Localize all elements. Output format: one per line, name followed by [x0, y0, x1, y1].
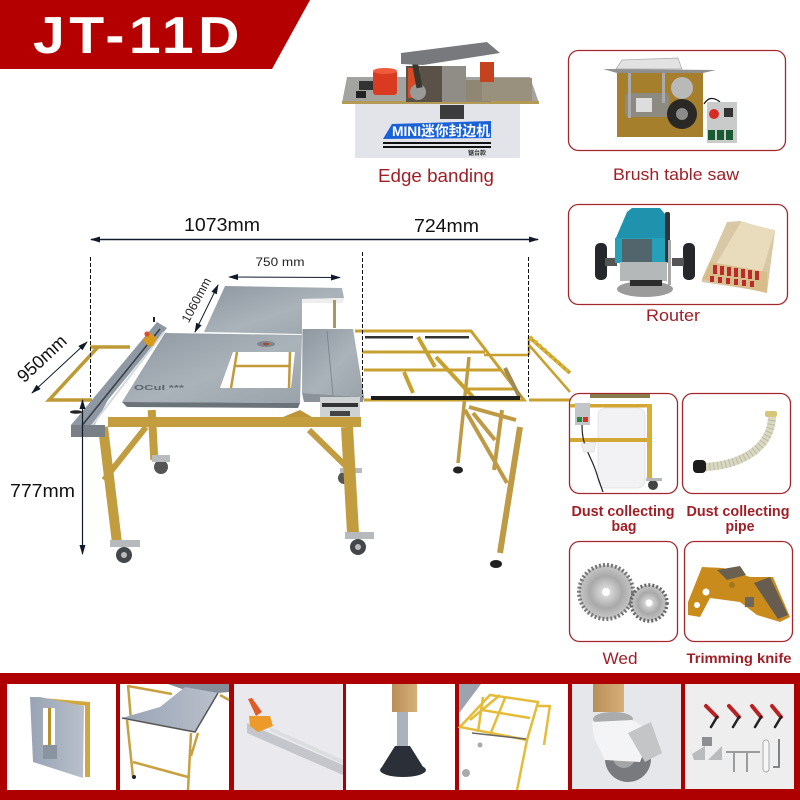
dimension: 750 mm [229, 255, 340, 278]
card: trimming knife [684, 542, 792, 642]
dimension: 1073 / 724 width [91, 215, 538, 240]
label: router: Router [646, 307, 701, 325]
bottom accessories strip [0, 673, 800, 800]
thumbnail: levelling foot [346, 684, 455, 790]
rear casters and legs [148, 410, 362, 484]
front legs and braces [103, 427, 353, 543]
main machine: sliding table saw [49, 286, 570, 568]
product: edge banding machine [342, 42, 539, 158]
dimension: 950mm: 950mm [13, 331, 71, 386]
card: router [568, 204, 788, 304]
thumbnail: side table [120, 684, 229, 790]
label: wed: Wed [602, 649, 638, 668]
label: dust collecting bag: bag [612, 519, 636, 535]
card: saw blades [570, 542, 678, 642]
right table plate [302, 329, 364, 397]
fence clamp [143, 333, 157, 346]
thumbnail: fence clamp [234, 684, 343, 790]
dimension: 950mm [13, 331, 87, 393]
title banner [0, 0, 310, 69]
product: edge banding machine: MINI迷你封边机 [392, 123, 490, 139]
back plate [204, 286, 344, 334]
main table top [122, 333, 302, 403]
right extension feet [453, 466, 502, 568]
thumbnail: caster wheel [572, 684, 681, 789]
dimension guide lines [90, 252, 528, 397]
right extension frame [355, 331, 570, 400]
label: dust collecting pipe: pipe [726, 519, 754, 535]
cross beam [108, 417, 361, 427]
label: trimming knife: Trimming knife [686, 650, 792, 666]
dimension: 750 mm: 750 mm [256, 255, 304, 269]
right extension legs [458, 357, 520, 553]
aluminium extrusion [320, 397, 360, 421]
label: dust collecting bag: Dust collecting [572, 504, 674, 520]
label: dust collecting bag [572, 504, 674, 535]
label: edge banding: Edge banding [378, 166, 494, 186]
dimension: 1073 / 724 width: 724mm [414, 216, 479, 236]
main machine: sliding table saw: OCuI *** [134, 385, 185, 392]
card: dust collecting pipe [682, 394, 790, 494]
card: brush table saw [568, 50, 786, 150]
label: brush table saw: Brush table saw [613, 166, 739, 184]
dimension: 777mm: 777mm [10, 481, 75, 501]
card: dust collecting bag [570, 394, 678, 494]
product: edge banding machine: 锯台款 [468, 149, 486, 157]
left folding frame [49, 347, 130, 400]
thumbnail: hardware kit [685, 684, 794, 789]
thumbnail: folded table [7, 684, 116, 790]
dimension: 1060mm: 1060mm [179, 275, 214, 325]
front casters [110, 532, 374, 563]
label: dust collecting pipe: Dust collecting [686, 504, 790, 520]
title banner: JT-11D [33, 6, 244, 64]
table opening [220, 352, 295, 388]
label: dust collecting pipe [686, 504, 790, 535]
fence rail [71, 322, 167, 437]
dimension: 1073 / 724 width: 1073mm [184, 215, 260, 235]
thumbnail: extension frame [459, 684, 568, 790]
